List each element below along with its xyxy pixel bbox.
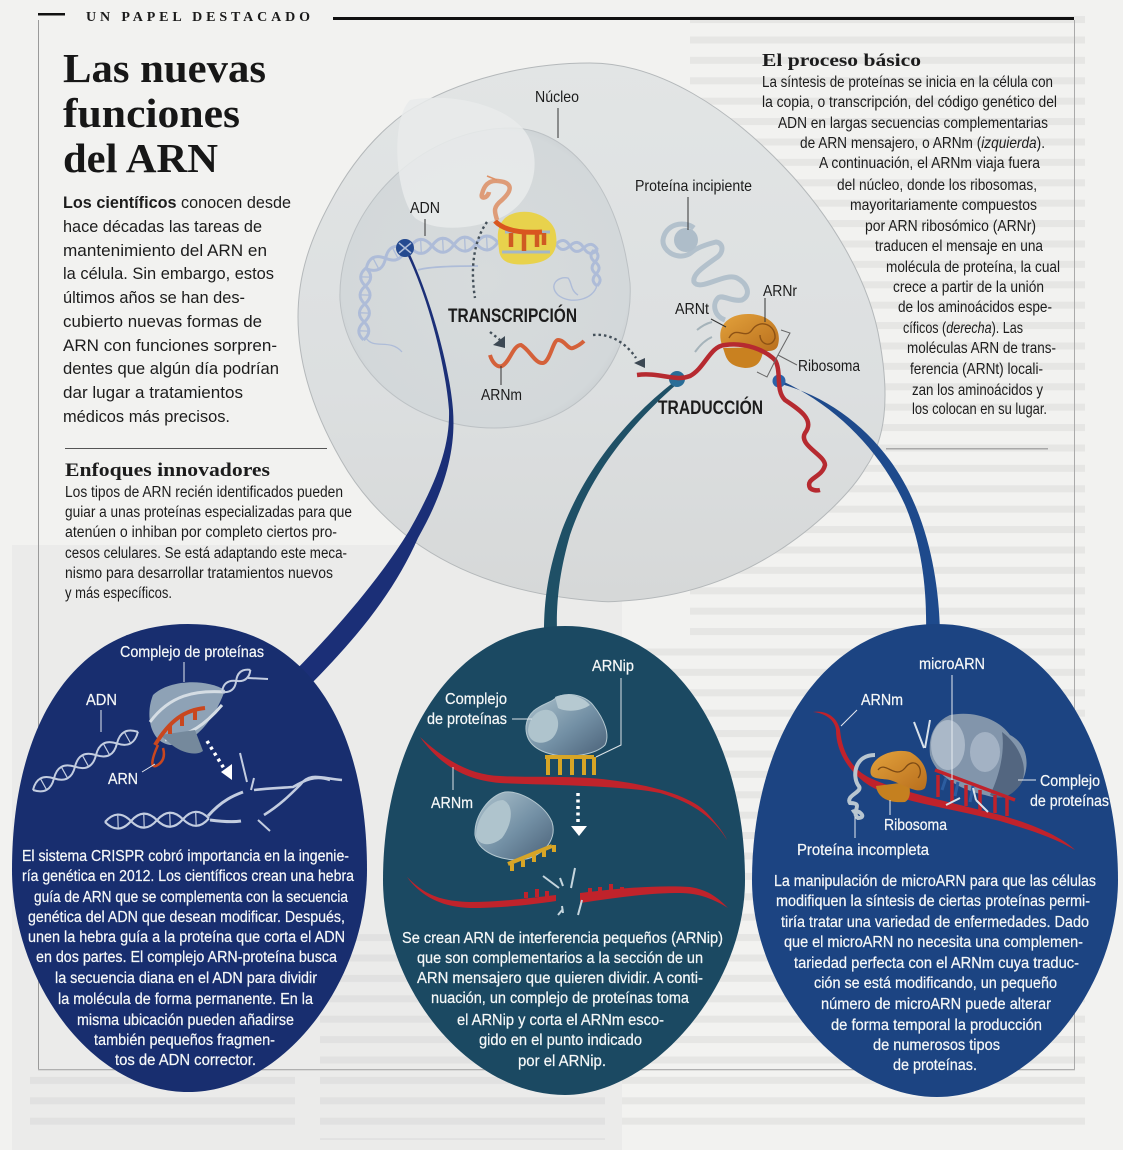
- text block: el proceso basico: molécula de proteína, la cual: [886, 259, 1060, 276]
- panel: CRISPR: [12, 624, 367, 1092]
- body text: El sistema CRISPR cobró importancia en la ingenie-: [22, 848, 349, 865]
- cell labels: ARNt: [675, 301, 709, 318]
- body text: [774, 873, 1096, 1074]
- labels: Proteína incompleta: [797, 842, 929, 859]
- text block: el proceso basico: mayoritariamente compuestos: [850, 197, 1037, 214]
- body text: también pequeños fragmen-: [94, 1032, 275, 1049]
- labels: de proteínas: [1030, 793, 1109, 810]
- text block: el proceso basico: de los aminoácidos espe-: [898, 299, 1052, 316]
- DNA upper with cas complex: [30, 666, 268, 796]
- connector: blue: [780, 380, 940, 632]
- panel: ARNip: [383, 626, 745, 1095]
- text block: el proceso basico: zan los aminoácidos y: [912, 382, 1043, 399]
- ribosome: [870, 751, 927, 802]
- body text: tariedad perfecta con el ARNm cuya traduc-: [794, 955, 1079, 972]
- intro text block: dentes que algún día podrían: [63, 359, 279, 378]
- heading and text: enfoques innovadores: cesos celulares. Se está adaptando este meca-: [65, 545, 347, 562]
- text block: el proceso basico: cíficos (derecha). Las: [903, 320, 1023, 337]
- body text: en dos partes. El complejo ARN-proteína busca: [36, 949, 337, 966]
- text block: el proceso basico: traducen el mensaje en una: [875, 238, 1043, 255]
- protein complex upper: [526, 695, 607, 775]
- body text: gido en el punto indicado: [479, 1032, 642, 1049]
- labels: [86, 644, 264, 788]
- text block: el proceso basico: por ARN ribosómico (ARNr): [865, 218, 1036, 235]
- icon: ribosome: [695, 314, 779, 368]
- protein complex: [930, 714, 1027, 798]
- heading and text: enfoques innovadores: atenúen o inhiban por completo ciertos pro-: [65, 524, 337, 541]
- body text: La manipulación de microARN para que las células: [774, 873, 1096, 890]
- body text: de proteínas.: [893, 1057, 977, 1074]
- labels: Complejo: [1040, 773, 1100, 790]
- labels: ARNm: [861, 692, 903, 709]
- cell labels: Proteína incipiente: [635, 178, 752, 195]
- ribosome bracket: [757, 330, 797, 377]
- nodes: [396, 239, 786, 388]
- text block: el proceso basico: del núcleo, donde los ribosomas,: [837, 177, 1037, 194]
- cut mRNA: [407, 877, 728, 908]
- protein complex lower: [475, 792, 554, 871]
- text block: el proceso basico: La síntesis de proteínas se inicia en la célula con: [762, 74, 1053, 91]
- title: Las nuevas: [63, 45, 266, 91]
- intro text block: la célula. Sin embargo, estos: [63, 264, 274, 283]
- text block: el proceso basico: la copia, o transcripción, del código genético del: [762, 94, 1057, 111]
- labels: ARN: [108, 771, 138, 788]
- body text: misma ubicación pueden añadirse: [77, 1012, 294, 1029]
- red strand: [813, 712, 1075, 850]
- intro text block: últimos años se han des-: [63, 288, 245, 307]
- cell labels: [410, 89, 860, 419]
- labels: [797, 656, 1109, 859]
- incomplete protein: [849, 755, 875, 818]
- body text: ARN mensajero que quieren dividir. A conti-: [417, 970, 703, 987]
- cell labels: TRANSCRIPCIÓN: [448, 305, 577, 327]
- body text: [22, 848, 354, 1069]
- cell labels: ARNm: [481, 387, 522, 404]
- body text: tos de ADN corrector.: [115, 1052, 256, 1069]
- intro text block: Los científicos conocen desde: [63, 193, 291, 212]
- body text: número de microARN puede alterar: [821, 996, 1051, 1013]
- title: del ARN: [63, 135, 218, 181]
- labels: Complejo: [445, 691, 507, 708]
- text block: el proceso basico: de ARN mensajero, o ARNm (izquierda).: [800, 135, 1045, 152]
- body text: por el ARNip.: [518, 1053, 606, 1070]
- connector: teal: [544, 381, 677, 632]
- body text: que el microARN no necesita una complemen-: [784, 934, 1083, 951]
- labels: [427, 658, 634, 812]
- title: funciones: [63, 90, 240, 136]
- arrowheads: [493, 336, 645, 368]
- header: un papel destacado: UN PAPEL DESTACADO: [86, 10, 310, 25]
- intro text block: ARN con funciones sorpren-: [63, 336, 277, 355]
- mRNA strand: [490, 340, 584, 366]
- body text: Se crean ARN de interferencia pequeños (ARNip): [402, 930, 723, 947]
- body text: la molécula de forma permanente. En la: [58, 991, 313, 1008]
- header: un papel destacado: [38, 10, 1074, 25]
- body text: la secuencia diana en el ADN para dividir: [55, 970, 317, 987]
- cell labels: ADN: [410, 200, 440, 217]
- intro text block: [63, 193, 291, 426]
- text block: el proceso basico: los colocan en su lugar.: [912, 401, 1047, 418]
- intro text block: cubierto nuevas formas de: [63, 312, 262, 331]
- body text: de forma temporal la producción: [831, 1017, 1042, 1034]
- labels: microARN: [919, 656, 985, 673]
- labels: ARNm: [431, 795, 473, 812]
- body text: unen la hebra guía a la proteína que corta el ADN: [28, 929, 345, 946]
- translating mRNA: [637, 344, 825, 490]
- connector: navy: [293, 248, 453, 688]
- labels: Ribosoma: [884, 817, 947, 834]
- cell labels: TRADUCCIÓN: [658, 397, 763, 419]
- heading and text: enfoques innovadores: guiar a unas proteínas especializadas para que: [65, 504, 352, 521]
- cell labels: Núcleo: [535, 89, 579, 106]
- body text: tiría tratar una variedad de enfermedades. Dado: [781, 914, 1089, 931]
- heading and text: enfoques innovadores: y más específicos.: [65, 585, 172, 602]
- icon: transcription bubble: [482, 176, 556, 264]
- nucleus: [340, 98, 630, 428]
- title: [63, 45, 266, 181]
- intro text block: dar lugar a tratamientos: [63, 383, 243, 402]
- intro text block: mantenimiento del ARN en: [63, 241, 267, 260]
- cell illustration: [298, 63, 885, 602]
- labels: Complejo de proteínas: [120, 644, 264, 661]
- dotted arrow: transcription: [473, 222, 636, 358]
- intro text block: médicos más precisos.: [63, 407, 230, 426]
- text block: el proceso basico: A continuación, el ARNm viaja fuera: [819, 155, 1040, 172]
- mRNA upper: [420, 737, 727, 840]
- dotted arrow: [576, 793, 580, 825]
- heading and text: enfoques innovadores: [65, 461, 352, 602]
- text block: el proceso basico: El proceso básico: [762, 50, 921, 70]
- body text: de numerosos tipos: [873, 1037, 1000, 1054]
- labels: ARNip: [592, 658, 634, 675]
- body text: que son complementarios a la sección de un: [417, 950, 703, 967]
- body text: genética del ADN que desean modificar. Después,: [28, 909, 345, 926]
- body text: modifiquen la síntesis de ciertas proteínas permi-: [776, 893, 1090, 910]
- text block: el proceso basico: ferencia (ARNt) locali-: [910, 361, 1043, 378]
- labels: ADN: [86, 692, 117, 709]
- dotted arrow: [207, 741, 225, 770]
- text block: el proceso basico: [762, 50, 1060, 418]
- body text: nuación, un complejo de proteínas toma: [431, 990, 689, 1007]
- cut DNA: [105, 753, 342, 831]
- body text: guía de ARN que se complementa con la secuencia: [34, 889, 348, 906]
- icon: incipient protein: [663, 224, 747, 320]
- body text: ción se está modificando, un pequeño: [814, 975, 1057, 992]
- cell labels: Ribosoma: [798, 358, 860, 375]
- labels: de proteínas: [427, 711, 507, 728]
- heading and text: enfoques innovadores: nismo para desarrollar tratamientos nuevos: [65, 565, 333, 582]
- text block: el proceso basico: ADN en largas secuencias complementarias: [778, 115, 1048, 132]
- text block: el proceso basico: moléculas ARN de trans-: [907, 340, 1056, 357]
- heading and text: enfoques innovadores: Los tipos de ARN recién identificados pueden: [65, 484, 343, 501]
- body text: el ARNip y corta el ARNm esco-: [457, 1012, 664, 1029]
- panel: microARN: [752, 624, 1118, 1097]
- intro text block: hace décadas las tareas de: [63, 217, 262, 236]
- body text: [402, 930, 723, 1070]
- DNA in nucleus: [358, 235, 601, 352]
- heading and text: enfoques innovadores: Enfoques innovadores: [65, 461, 270, 481]
- text block: el proceso basico: crece a partir de la unión: [893, 279, 1044, 296]
- body text: ría genética en 2012. Los científicos crean una hebra: [22, 868, 354, 885]
- cell labels: ARNr: [763, 283, 798, 300]
